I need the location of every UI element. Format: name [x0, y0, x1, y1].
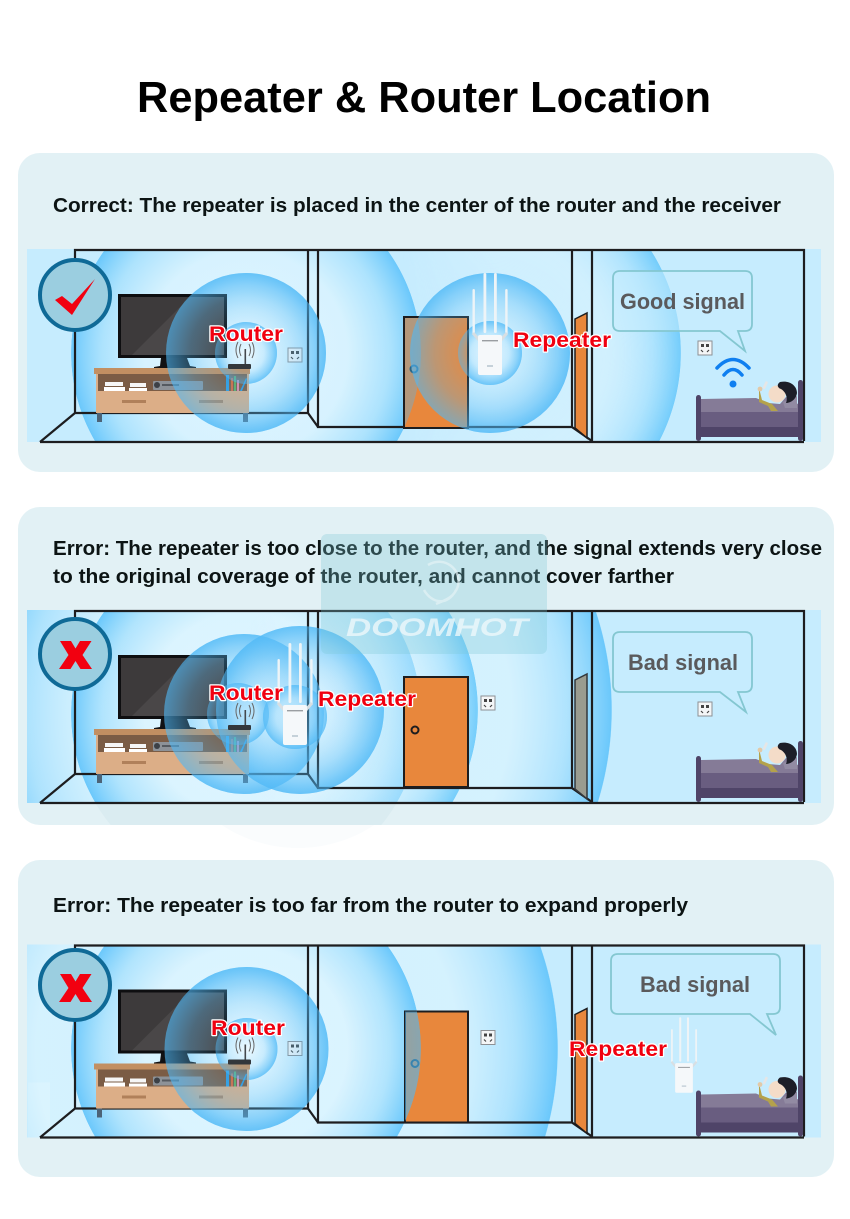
label: repeater: Repeater [318, 687, 417, 711]
label: router: Router [211, 1016, 286, 1040]
heading: correct: Correct: The repeater is placed in the center of the router and the receiver [53, 195, 781, 217]
heading: too close: to the original coverage of the router, and cannot cover farther [53, 566, 674, 588]
label: repeater: Repeater [513, 328, 612, 352]
speech bubble: good signal: Good signal [620, 289, 745, 314]
watermark: DOOMHOT [346, 614, 532, 642]
panel: correct placement [18, 153, 834, 472]
icon: error badge [40, 619, 110, 689]
icon: wifi [717, 360, 749, 388]
speech bubble: bad signal: Bad signal [640, 972, 750, 997]
heading: too far: Error: The repeater is too far from the router to expand properly [53, 895, 689, 917]
illustration: too far layout [27, 944, 821, 1138]
panel: repeater too far [18, 860, 834, 1177]
illustration: correct layout [27, 249, 821, 442]
label: router: Router [209, 681, 284, 705]
heading: too close [53, 538, 822, 588]
speech bubble: bad signal: Bad signal [628, 650, 738, 675]
title: Repeater & Router Location [137, 73, 711, 122]
illustration: too close layout [27, 610, 821, 803]
icon: error badge [40, 950, 110, 1020]
label: repeater: Repeater [569, 1037, 668, 1061]
speech bubble: good signal [613, 271, 752, 351]
speech bubble: bad signal [611, 954, 780, 1035]
heading: too close: Error: The repeater is too close to the router, and the signal extends very close [53, 538, 822, 560]
speech bubble: bad signal [613, 632, 752, 712]
watermark [321, 534, 547, 654]
label: router: Router [209, 322, 284, 346]
panel: repeater too close [18, 507, 834, 825]
icon: check badge [40, 260, 110, 330]
